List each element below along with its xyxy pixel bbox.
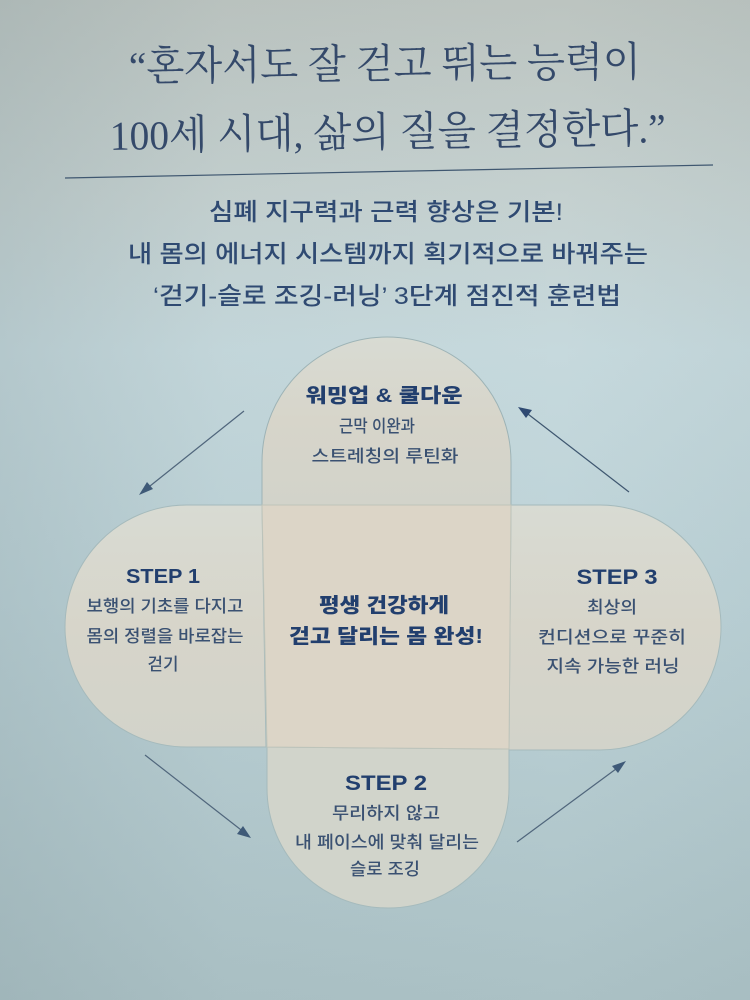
step 3 text: 지속 가능한 러닝	[546, 657, 680, 676]
step 3 text	[538, 566, 686, 676]
subtitle text block: ‘걷기-슬로 조깅-러닝’ 3단계 점진적 훈련법	[153, 283, 621, 310]
subtitle text block: 심폐 지구력과 근력 향상은 기본!	[209, 199, 563, 226]
step 3 text: STEP 3	[576, 566, 658, 589]
panel: center	[262, 505, 511, 749]
center text	[289, 594, 483, 648]
subtitle text block	[128, 199, 648, 310]
step 1 text: STEP 1	[126, 566, 200, 588]
center text: 평생 건강하게	[319, 594, 449, 617]
arrow: step 1 to step 2	[145, 755, 251, 838]
warm-up text: 스트레칭의 루틴화	[312, 447, 459, 466]
step 2 text: STEP 2	[345, 772, 427, 795]
arrow: step 3 to warm-up	[518, 407, 629, 492]
step 2 text: 슬로 조깅	[350, 860, 420, 879]
step 1 text: 보행의 기초를 다지고	[86, 597, 244, 616]
step 1 text: 몸의 정렬을 바로잡는	[86, 627, 244, 646]
step 2 text: 내 페이스에 맞춰 달리는	[295, 833, 479, 852]
arrow: step 2 to step 3	[517, 761, 626, 842]
step 2 text: 무리하지 않고	[332, 804, 440, 823]
step 3 text: 최상의	[587, 598, 637, 617]
panel: warm-up and cool-down	[262, 337, 511, 505]
warm-up text	[306, 385, 463, 466]
panel: step 2	[267, 747, 509, 908]
step 1 text: 걷기	[148, 655, 178, 674]
center text: 걷고 달리는 몸 완성!	[289, 625, 483, 648]
panel: step 3	[509, 505, 721, 750]
cross diagram	[65, 337, 721, 908]
step 3 text: 컨디션으로 꾸준히	[538, 628, 686, 647]
arrow: warm-up to step 1	[139, 411, 244, 495]
warm-up text: 워밍업 & 쿨다운	[306, 385, 463, 407]
warm-up text: 근막 이완과	[339, 417, 415, 436]
title	[110, 39, 666, 159]
title: “혼자서도 잘 걷고 뛰는 능력이	[129, 39, 641, 89]
step 2 text	[295, 772, 479, 879]
title: 100세 시대, 삶의 질을 결정한다.”	[110, 105, 666, 159]
step 1 text	[86, 566, 244, 674]
subtitle text block: 내 몸의 에너지 시스템까지 획기적으로 바꿔주는	[128, 241, 648, 268]
panel: step 1	[65, 505, 266, 747]
